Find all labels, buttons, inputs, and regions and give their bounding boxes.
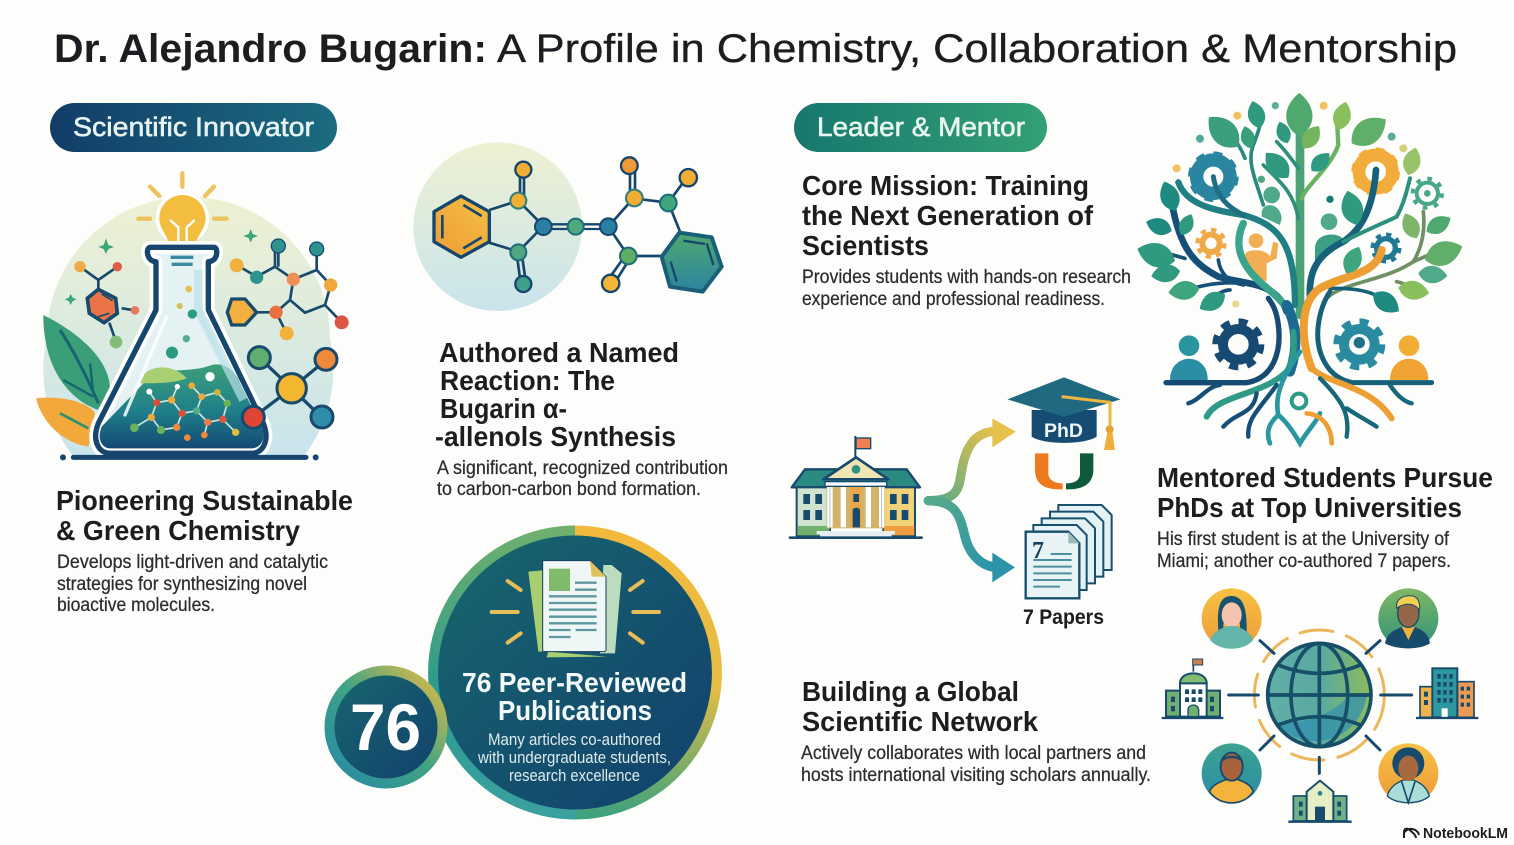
text: Many articles co-authored bbox=[488, 730, 661, 749]
heading and text: Pioneering Sustainable & Green Chemistry: & Green Chemistry bbox=[56, 515, 300, 546]
icon: reaction molecule bbox=[413, 142, 722, 311]
heading and text: Core Mission: the Next Generation of bbox=[802, 200, 1094, 231]
heading and text: Global Network: hosts international visiting scholars annually. bbox=[801, 765, 1151, 786]
heading and text: Mentored Students: His first student is at the University of bbox=[1157, 529, 1450, 550]
text: with undergraduate students, bbox=[477, 748, 671, 767]
icon: stack of papers bbox=[1026, 505, 1112, 598]
spokes bbox=[1229, 641, 1412, 773]
molecule inside flask bbox=[130, 382, 239, 441]
icon: leaves bbox=[36, 315, 110, 447]
heading and text: Mentored Students: Mentored Students Pursue bbox=[1157, 462, 1493, 493]
title: Dr. Alejandro Bugarin: bbox=[54, 27, 487, 71]
section pill: Leader & Mentor: Leader & Mentor bbox=[817, 112, 1025, 142]
arrow: to PhD bbox=[928, 418, 1016, 501]
globe bbox=[1268, 643, 1371, 747]
large circle bbox=[433, 530, 717, 814]
base line bbox=[73, 450, 306, 465]
icon: global network bbox=[1162, 588, 1478, 822]
heading and text: Core Mission: Provides students with hands-on research bbox=[802, 267, 1131, 288]
icon: flask with molecules bbox=[36, 173, 349, 460]
heading and text: named reaction: A significant, recognized contribution bbox=[437, 458, 728, 479]
heading and text: Pioneering Sustainable & Green Chemistry: strategies for synthesizing novel bbox=[57, 574, 307, 595]
heading and text: Mentored Students: Miami; another co-authored 7 papers. bbox=[1157, 551, 1451, 572]
building right bbox=[1416, 668, 1478, 718]
molecule lower right bbox=[242, 347, 337, 428]
person 4 bbox=[1378, 743, 1438, 803]
text bbox=[462, 667, 687, 785]
heading and text: named reaction: Reaction: The bbox=[440, 365, 615, 396]
flask body bbox=[96, 247, 266, 453]
heading and text: Core Mission bbox=[802, 170, 1131, 310]
icon: university building bbox=[790, 436, 922, 538]
gears bbox=[1191, 150, 1442, 367]
heading and text: Global Network: Building a Global bbox=[802, 676, 1019, 707]
platform and roots bbox=[1166, 292, 1432, 443]
person 1 bbox=[1202, 588, 1262, 649]
heading and text: Core Mission: Scientists bbox=[802, 230, 929, 261]
icon: PhD cap: PhD bbox=[1044, 421, 1083, 442]
heading and text: named reaction: Bugarin α- bbox=[440, 393, 567, 424]
icon: light bulb bbox=[138, 173, 227, 245]
icon: University of Miami U logo bbox=[1035, 453, 1093, 489]
icon: PhD cap bbox=[1007, 377, 1121, 450]
heading and text: Global Network: Scientific Network bbox=[802, 706, 1038, 737]
heading and text: Global Network: Actively collaborates with local partners and bbox=[801, 743, 1146, 764]
title: A Profile in Chemistry, Collaboration & Mentorship bbox=[497, 27, 1457, 71]
NotebookLM logo: NotebookLM bbox=[1423, 826, 1508, 842]
heading and text: Core Mission: experience and professional readiness. bbox=[802, 289, 1105, 310]
heading and text: Mentored Students bbox=[1157, 462, 1493, 572]
heading and text: named reaction: -allenols Synthesis bbox=[435, 421, 676, 452]
person 2 bbox=[1378, 588, 1438, 648]
building left bbox=[1162, 659, 1223, 718]
people bbox=[1170, 102, 1428, 380]
text: 76 Peer-Reviewed bbox=[462, 667, 687, 698]
heading and text: named reaction: Authored a Named bbox=[439, 337, 679, 368]
heading and text: Pioneering Sustainable & Green Chemistry: bioactive molecules. bbox=[57, 595, 215, 616]
section pill: Scientific Innovator: Scientific Innovator bbox=[73, 112, 314, 142]
heading and text: Global Network bbox=[801, 676, 1151, 786]
heading and text: named reaction: to carbon-carbon bond formation. bbox=[437, 479, 701, 500]
dashed ring bbox=[1254, 630, 1384, 760]
section pill: Scientific Innovator bbox=[50, 103, 337, 152]
heading and text: Core Mission: Core Mission: Training bbox=[802, 170, 1089, 201]
sparkles bbox=[65, 229, 258, 305]
number on paper stack: 7 bbox=[1032, 538, 1044, 564]
heading and text: Pioneering Sustainable & Green Chemistry: Pioneering Sustainable bbox=[56, 485, 353, 516]
title bbox=[54, 27, 1457, 71]
arrow: to papers bbox=[928, 501, 1015, 582]
person 3 bbox=[1202, 743, 1262, 803]
heading and text: Pioneering Sustainable & Green Chemistry bbox=[56, 485, 353, 616]
text: research excellence bbox=[509, 766, 640, 785]
heading and text: named reaction bbox=[435, 337, 728, 500]
icon: mentorship tree bbox=[1134, 93, 1466, 443]
small circle: 76: 76 bbox=[350, 690, 421, 764]
heading and text: Pioneering Sustainable & Green Chemistry: Develops light-driven and catalytic bbox=[57, 552, 328, 573]
small circle: 76 bbox=[330, 670, 442, 784]
leaves bbox=[1134, 93, 1466, 319]
molecule left bbox=[74, 261, 139, 348]
heading and text: Mentored Students: PhDs at Top Universities bbox=[1157, 492, 1462, 523]
section pill: Leader & Mentor bbox=[794, 103, 1047, 152]
text: Publications bbox=[498, 695, 652, 726]
building bottom bbox=[1288, 781, 1352, 822]
canopy branches bbox=[1155, 115, 1440, 368]
publications badge bbox=[330, 530, 717, 814]
label: 7 Papers: 7 Papers bbox=[1023, 606, 1104, 629]
icon: document bbox=[492, 561, 659, 657]
molecule upper right bbox=[227, 239, 349, 340]
